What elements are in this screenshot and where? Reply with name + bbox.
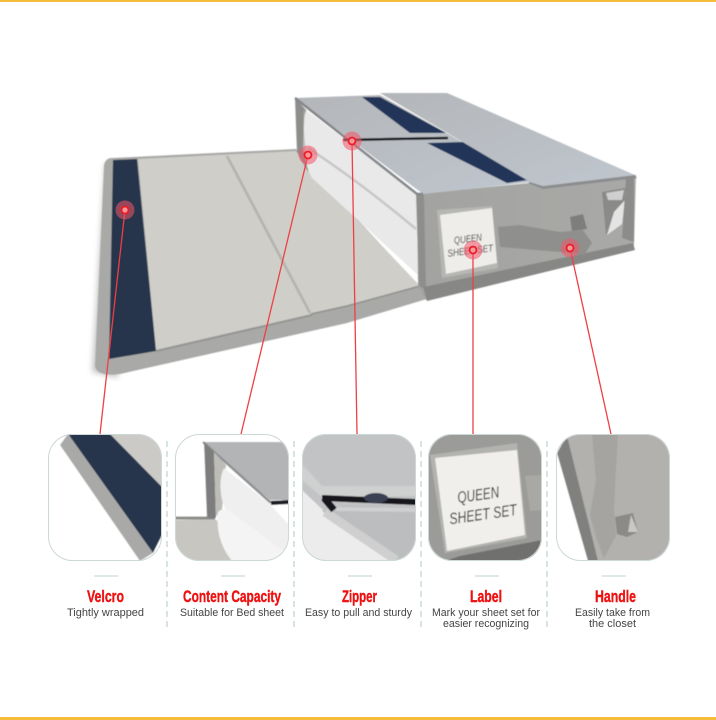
panel: label detail photo [428, 434, 542, 561]
caption: velcro: Tightly wrapped [67, 607, 144, 619]
panel: content capacity detail photo [175, 434, 289, 561]
caption: label: easier recognizing [443, 618, 529, 630]
top flap [380, 93, 637, 189]
panel: handle detail photo [556, 434, 670, 561]
name label pocket [437, 206, 498, 278]
caption: content capacity: Suitable for Bed sheet [180, 607, 284, 619]
panel: velcro detail photo [48, 434, 162, 561]
short rules above captions [94, 575, 626, 577]
panel: zipper detail photo [302, 434, 416, 561]
caption: handle: Handle [595, 587, 636, 606]
caption: velcro: Velcro [87, 587, 124, 606]
name label pocket: SHEET SET [447, 243, 495, 260]
product photo: open storage bag [92, 93, 637, 378]
navy velcro strips on box [362, 97, 528, 183]
box top rim [295, 98, 423, 194]
box front face [417, 175, 636, 300]
caption: content capacity [180, 587, 284, 619]
box corner seam [416, 194, 426, 290]
gold top border [0, 0, 716, 2]
dashed column dividers [167, 441, 547, 630]
caption: zipper [305, 587, 412, 619]
panel: label detail photo: SHEET SET [448, 502, 519, 528]
gold bottom border [0, 717, 716, 720]
caption: handle: the closet [589, 618, 636, 630]
caption: zipper: Easy to pull and sturdy [305, 607, 412, 619]
caption: handle: Easily take from [575, 607, 650, 619]
zipper [343, 138, 448, 140]
caption: label [432, 587, 540, 630]
callout lines [100, 141, 611, 434]
caption: zipper: Zipper [342, 587, 377, 606]
caption: content capacity: Content Capacity [183, 587, 281, 606]
box top surface [295, 95, 532, 194]
bag back corner [295, 98, 308, 172]
caption: label: Mark your sheet set for [432, 607, 540, 619]
open lid mat [95, 149, 430, 375]
carry handle [498, 214, 592, 255]
name label pocket: QUEEN [453, 233, 483, 247]
mat shadow [92, 162, 118, 378]
bottom flange [423, 243, 635, 301]
caption: label: Label [470, 587, 502, 606]
caption: velcro [67, 587, 144, 619]
panel: label detail photo: QUEEN [456, 484, 501, 507]
plastic side window [602, 176, 634, 242]
caption: handle [575, 587, 650, 630]
folded sheets [304, 110, 418, 275]
hotspot markers [116, 132, 580, 260]
